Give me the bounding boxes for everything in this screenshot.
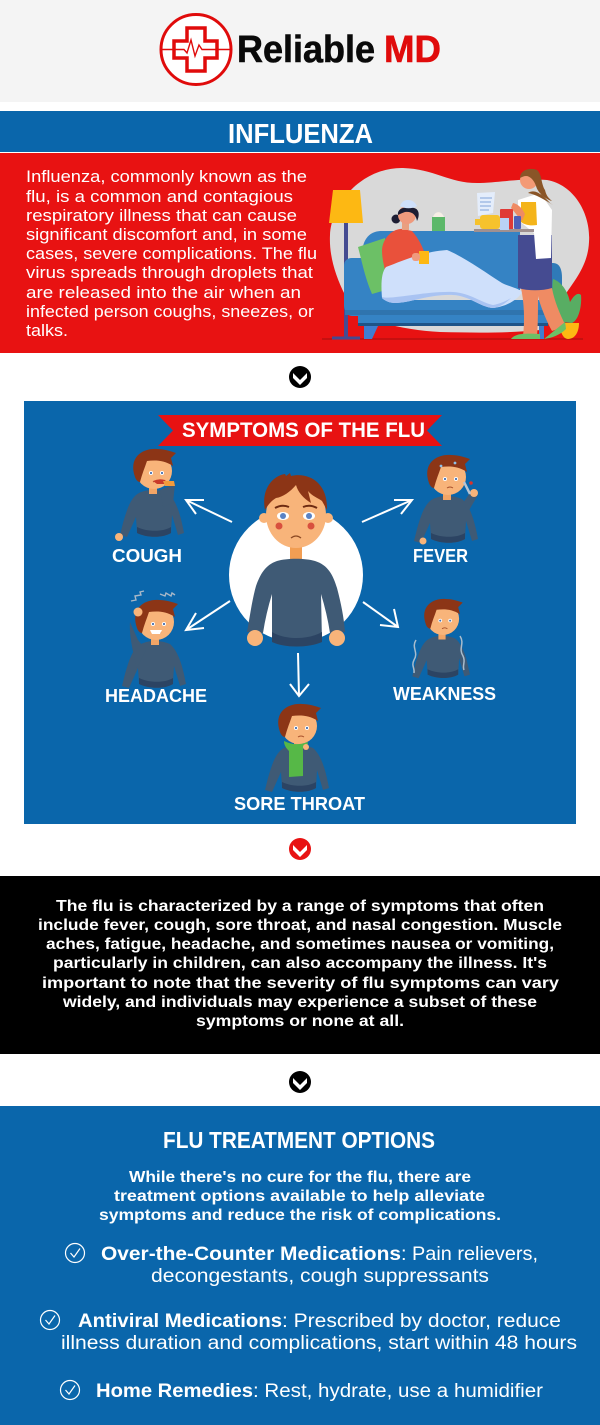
symptom: headache: HEADACHE	[105, 685, 207, 706]
intro text: flu, is a common and contagious	[26, 187, 293, 206]
tissue box	[432, 217, 445, 231]
treatment intro text: While there's no cure for the flu, there are	[129, 1169, 471, 1186]
symptoms heading ribbon	[158, 415, 442, 446]
plant	[552, 279, 581, 323]
arrow to weakness	[363, 602, 398, 627]
symptoms heading ribbon: SYMPTOMS OF THE FLU	[182, 419, 425, 442]
option: over-the-counter medications	[66, 1244, 538, 1287]
panel: symptom description	[0, 876, 600, 1054]
option: antiviral medications: illness duration and complications, start within 48 hours	[61, 1333, 577, 1354]
blanket	[381, 250, 522, 308]
option: home remedies: Home Remedies	[96, 1381, 253, 1402]
option: antiviral medications: : Prescribed by doctor, reduce	[282, 1311, 561, 1332]
icon: chevron down red	[289, 838, 311, 860]
arrow to sore throat	[290, 653, 309, 696]
arrow to headache	[186, 601, 230, 630]
sofa	[362, 231, 520, 290]
symptom: sore throat	[234, 704, 366, 814]
option: over-the-counter medications: Over-the-Counter Medications	[101, 1244, 401, 1265]
panel: symptom description: The flu is characterized by a range of symptoms that often	[56, 898, 544, 915]
illustration: caregiver bringing medicine to sick woman on sofa	[322, 168, 589, 340]
treatment intro text	[99, 1169, 501, 1224]
icon: chevron down black	[289, 1071, 311, 1093]
intro text: talks.	[26, 321, 68, 340]
symptom: fever	[413, 455, 478, 566]
symptom: cough	[112, 449, 184, 566]
intro text: cases, severe complications. The flu	[26, 244, 317, 263]
sick woman	[382, 229, 428, 270]
arrow to fever	[362, 500, 412, 522]
intro text: are released into the air when an	[26, 283, 301, 302]
option: home remedies	[60, 1380, 544, 1402]
panel: symptoms of the flu	[24, 401, 576, 824]
panel: symptom description: important to note that the severity of flu symptoms can vary	[42, 975, 559, 992]
treatment intro text: treatment options available to help alleviate	[114, 1188, 485, 1205]
logo: ReliableMD: MD	[384, 29, 441, 71]
panel: symptom description: symptoms or none at all.	[196, 1013, 404, 1030]
logo: ReliableMD: Reliable	[237, 29, 375, 71]
symptom: weakness: WEAKNESS	[393, 683, 496, 704]
option: over-the-counter medications: decongestants, cough suppressants	[151, 1266, 489, 1287]
lamp	[344, 222, 348, 337]
option: antiviral medications: Antiviral Medications	[78, 1311, 282, 1332]
panel: symptom description: include fever, cough, sore throat, and nasal congestion. Muscle	[38, 917, 562, 934]
panel: influenza introduction	[0, 153, 600, 353]
icon: chevron down black	[289, 366, 311, 388]
caregiver woman	[521, 288, 566, 336]
symptom: headache	[105, 591, 207, 706]
intro text: Influenza, commonly known as the	[26, 167, 307, 186]
treatment heading: FLU TREATMENT OPTIONS	[163, 1127, 435, 1153]
option: over-the-counter medications: : Pain relievers,	[401, 1244, 538, 1265]
panel: symptom description: widely, and individuals may experience a subset of these	[62, 994, 537, 1011]
title bar: influenza	[0, 111, 600, 152]
symptom: sore throat: SORE THROAT	[234, 793, 366, 814]
panel: symptom description: particularly in children, can also accompany the illness. It's	[53, 955, 547, 972]
panel: symptom description: aches, fatigue, headache, and sometimes nausea or vomiting,	[46, 936, 554, 953]
tray with medicine	[474, 229, 534, 232]
panel: flu treatment options	[0, 1106, 600, 1425]
header band with logo	[0, 0, 600, 102]
option: antiviral medications	[40, 1310, 577, 1354]
title bar: influenza: INFLUENZA	[228, 118, 373, 149]
intro text	[26, 167, 317, 340]
symptom: cough: COUGH	[112, 545, 182, 566]
mug	[419, 251, 429, 264]
intro text: virus spreads through droplets that	[26, 263, 313, 282]
pillow	[358, 238, 386, 294]
intro text: respiratory illness that can cause	[26, 206, 297, 225]
intro text: infected person coughs, sneezes, or	[26, 302, 314, 321]
symptom: weakness	[393, 599, 496, 704]
logo: ReliableMD	[161, 14, 441, 84]
arrow to cough	[186, 500, 232, 522]
option: home remedies: : Rest, hydrate, use a humidifier	[253, 1381, 544, 1402]
central boy with white circle	[229, 473, 363, 646]
intro text: significant discomfort and, in some	[26, 225, 307, 244]
treatment intro text: symptoms and reduce the risk of complications.	[99, 1207, 501, 1224]
symptom: fever: FEVER	[413, 545, 468, 566]
